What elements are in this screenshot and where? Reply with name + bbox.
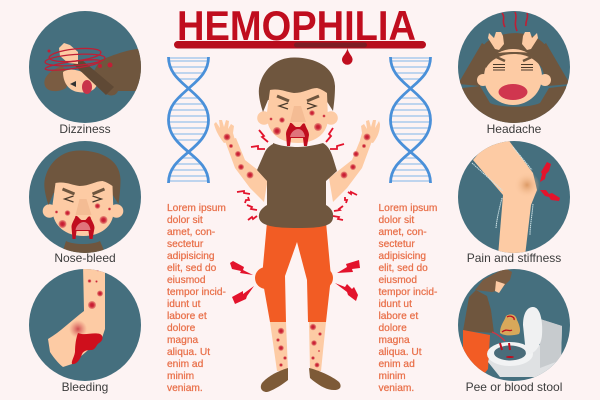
text block: left lorem ipsum: dolor sit [167, 215, 203, 226]
text block: left lorem ipsum: eiusmod [167, 275, 206, 286]
text block: right lorem ipsum: veniam. [378, 383, 414, 394]
trousers [255, 222, 333, 322]
text block: right lorem ipsum: Lorem ipsum [378, 203, 437, 214]
icon: DNA right [390, 57, 430, 183]
text block: right lorem ipsum: dolore [378, 323, 407, 334]
label: Pee or blood stool: Pee or blood stool [466, 380, 562, 394]
shirt [257, 143, 337, 228]
panel: nose-bleed [29, 141, 141, 260]
title bar with blood drop [174, 41, 426, 65]
text block: right lorem ipsum [378, 203, 437, 394]
text block: right lorem ipsum: minim [378, 371, 406, 382]
icon: DNA left [168, 57, 208, 183]
text block: right lorem ipsum: adipisicing [378, 251, 426, 262]
label: Dizziness: Dizziness [59, 122, 111, 136]
label: Bleeding: Bleeding [62, 380, 108, 394]
text block: left lorem ipsum: minim [167, 371, 194, 382]
text block: right lorem ipsum: elit, sed do [378, 263, 428, 274]
text block: right lorem ipsum: dolor sit [378, 215, 414, 226]
label: Pain and stiffness: Pain and stiffness [467, 251, 561, 265]
text block: right lorem ipsum: idunt ut [378, 299, 412, 310]
text block: left lorem ipsum: idunt ut [167, 299, 201, 310]
shoes [261, 368, 341, 392]
text block: left lorem ipsum: dolore [167, 323, 196, 334]
text block: left lorem ipsum: adipisicing [167, 251, 215, 262]
text block: left lorem ipsum: labore et [167, 311, 207, 322]
text block: right lorem ipsum: eiusmod [378, 275, 417, 286]
panel: headache [456, 11, 572, 130]
panel: bleeding [29, 265, 141, 381]
text block: right lorem ipsum: enim ad [378, 359, 415, 370]
label: Nose-bleed: Nose-bleed [54, 251, 116, 265]
text block: left lorem ipsum: tempor incid- [167, 287, 226, 298]
text block: left lorem ipsum: amet, con- [167, 227, 215, 238]
lower legs [270, 322, 326, 371]
panel: pee or blood stool [458, 268, 570, 382]
text block: left lorem ipsum: elit, sed do [167, 263, 217, 274]
panel: dizziness [29, 11, 146, 123]
panel: pain and stiffness [458, 138, 570, 256]
right arm [329, 120, 380, 202]
leg spots [276, 324, 322, 368]
pain bolts around figure [237, 128, 357, 220]
text block: left lorem ipsum: enim ad [167, 359, 204, 370]
text block: left lorem ipsum: sectetur [167, 239, 204, 250]
head [257, 57, 338, 146]
text block: right lorem ipsum: tempor incid- [378, 287, 437, 298]
label: Headache: Headache [487, 122, 542, 136]
text block: left lorem ipsum [167, 203, 226, 394]
text block: left lorem ipsum: magna [167, 335, 198, 346]
text block: right lorem ipsum: labore et [378, 311, 418, 322]
text block: right lorem ipsum: magna [378, 335, 410, 346]
left arm [214, 120, 268, 202]
text block: left lorem ipsum: veniam. [167, 383, 203, 394]
text block: right lorem ipsum: aliqua. Ut [378, 347, 422, 358]
knee pain bolts [230, 260, 360, 304]
text block: right lorem ipsum: sectetur [378, 239, 415, 250]
title: HEMOPHILIA [177, 2, 416, 49]
central figure [214, 57, 380, 392]
text block: left lorem ipsum: aliqua. Ut [167, 347, 210, 358]
text block: left lorem ipsum: Lorem ipsum [167, 203, 226, 214]
text block: right lorem ipsum: amet, con- [378, 227, 427, 238]
